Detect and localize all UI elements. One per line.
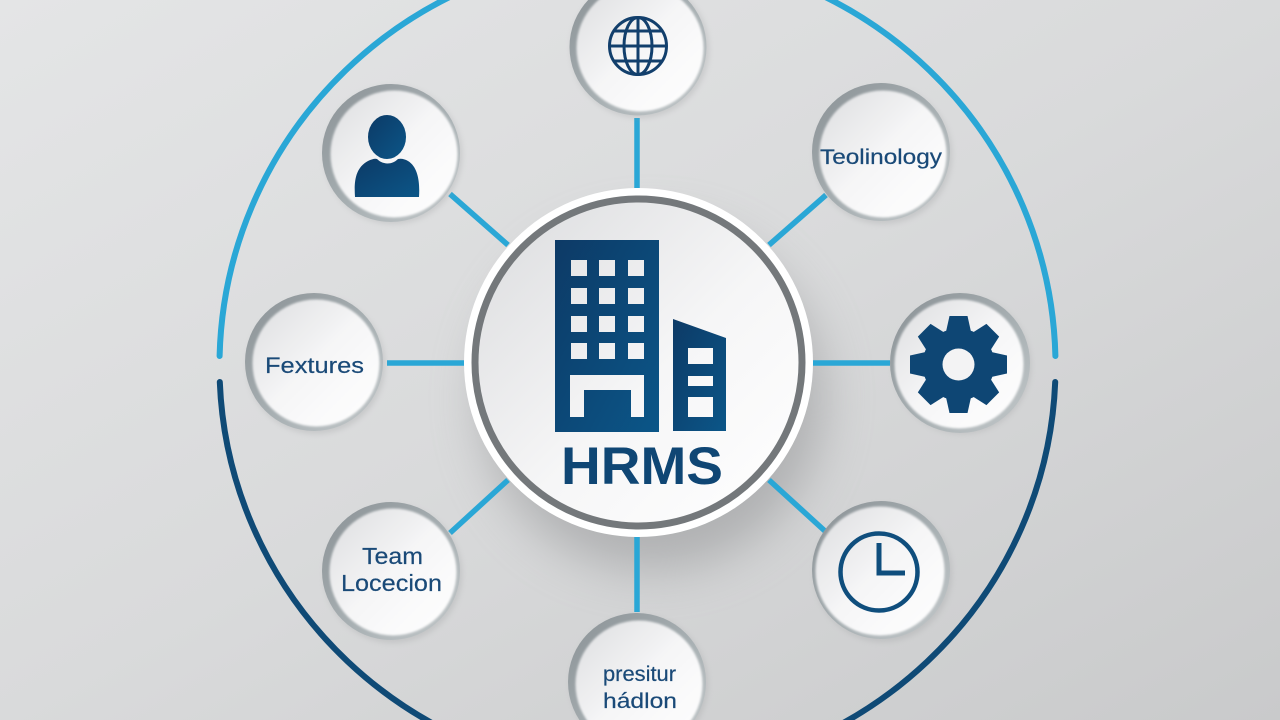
icon: globe	[609, 17, 667, 75]
satellite: bottom	[568, 613, 708, 720]
label: team location: Team	[362, 543, 423, 569]
icon: gear	[910, 316, 1007, 413]
outer ring: blue upper arc	[220, 0, 1055, 356]
icon: clock	[840, 534, 918, 610]
satellite: technology	[812, 83, 952, 224]
label: team location: Locecion	[341, 570, 442, 596]
satellite: features	[245, 293, 385, 434]
connectors between hub and satellites	[387, 118, 890, 612]
label: bottom	[603, 663, 677, 713]
satellite: globe	[570, 0, 709, 118]
hub shadow	[480, 226, 824, 570]
satellite: clock	[812, 501, 952, 642]
label: team location	[341, 543, 442, 596]
label: features: Fextures	[265, 353, 364, 378]
central hub	[464, 188, 813, 537]
HRMS label: HRMS	[561, 437, 723, 496]
satellite: person	[322, 84, 462, 224]
satellite: team location	[322, 502, 462, 643]
icon: person	[355, 115, 419, 197]
label: bottom: hádlon	[603, 690, 677, 713]
satellite: gear	[890, 293, 1031, 434]
outer ring: navy lower arc	[220, 382, 1055, 720]
label: technology: Teolinology	[820, 146, 943, 169]
icon: office buildings	[555, 240, 726, 432]
label: bottom: presitur	[603, 663, 676, 686]
